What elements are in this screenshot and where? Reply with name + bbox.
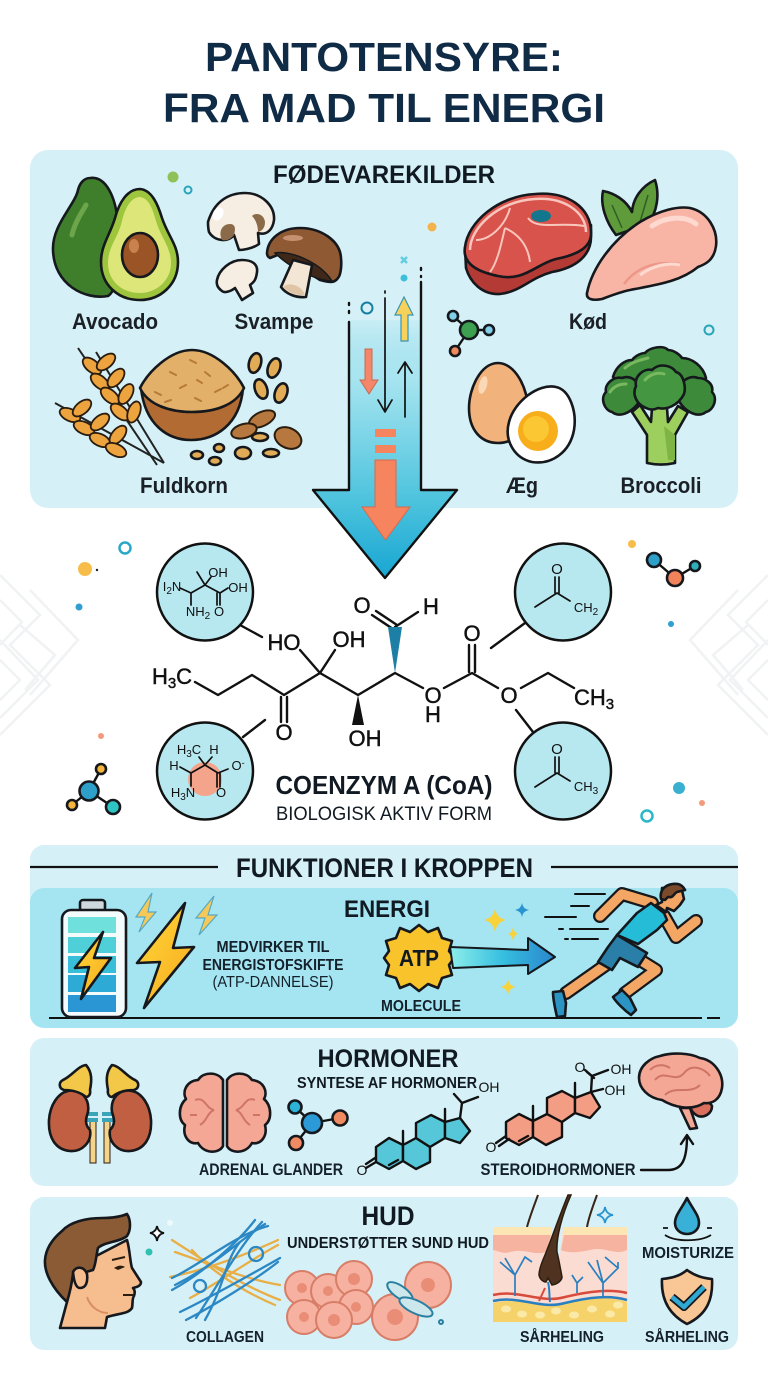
icon: battery bbox=[62, 900, 126, 1017]
heading: skin: HUD bbox=[362, 1201, 414, 1231]
chart: steroid molecule salmon bbox=[486, 1059, 632, 1155]
icon: sparkles bbox=[484, 903, 529, 995]
icon: ATP molecule: ATP bbox=[399, 945, 439, 971]
callout: ketone CH3: CH bbox=[574, 779, 593, 794]
title: FRA MAD TIL ENERGI bbox=[163, 85, 605, 131]
callout: amino acid: H bbox=[169, 758, 179, 773]
text: energy description bbox=[202, 939, 344, 991]
arrow: thin up bbox=[398, 362, 412, 417]
icon: brain side view bbox=[639, 1054, 722, 1129]
caption: coenzyme A: COENZYM A (CoA) bbox=[276, 770, 492, 800]
icon: skin cross section bbox=[493, 1195, 627, 1322]
callout: amino group: O bbox=[214, 604, 224, 619]
icon: shield with check bbox=[662, 1270, 712, 1324]
icon: hormone molecule bbox=[288, 1100, 348, 1150]
text: supports healthy skin: UNDERSTØTTER SUND HUD bbox=[287, 1235, 489, 1252]
icon: sparkles near face bbox=[146, 1220, 173, 1256]
atom labels: CH bbox=[574, 685, 606, 710]
heading: hormones: HORMONER bbox=[318, 1045, 458, 1073]
atom labels: O bbox=[353, 593, 371, 618]
icon: eggs bbox=[469, 363, 575, 462]
label: moisturize: MOISTURIZE bbox=[642, 1245, 734, 1262]
text: energy description: ENERGISTOFSKIFTE bbox=[202, 957, 344, 974]
icon: ATP molecule bbox=[384, 925, 454, 991]
callout: amino group bbox=[157, 544, 253, 640]
icon: skin cells bbox=[285, 1261, 451, 1340]
label: broccoli: Broccoli bbox=[620, 473, 702, 498]
atom labels: O bbox=[275, 720, 293, 745]
chart: steroid molecule salmon: O bbox=[575, 1059, 586, 1075]
panel: functions in the body bbox=[30, 845, 738, 1028]
atom labels: 3 bbox=[606, 696, 614, 713]
atom labels: H bbox=[425, 702, 441, 727]
callout: amino acid: N bbox=[186, 785, 195, 800]
icon: kidneys and adrenal glands bbox=[49, 1065, 151, 1163]
atom labels: O bbox=[500, 683, 518, 708]
arrow: yellow up bbox=[395, 297, 413, 341]
icon: runner bbox=[553, 884, 696, 1017]
callout: ketone CH3: O bbox=[551, 741, 563, 758]
heading: energy: ENERGI bbox=[344, 896, 430, 923]
atom labels bbox=[152, 593, 614, 751]
chart: steroid molecule salmon: OH bbox=[610, 1061, 632, 1077]
label: meat: Kød bbox=[569, 309, 607, 334]
atom labels: 3 bbox=[168, 675, 176, 692]
atom labels: OH bbox=[348, 726, 382, 751]
atom labels: C bbox=[176, 664, 192, 689]
callout: amino group: N bbox=[172, 579, 181, 594]
icon: meat bbox=[465, 194, 591, 294]
speed lines bbox=[545, 894, 608, 939]
callout: amino acid: H bbox=[171, 785, 180, 800]
decorative dots and molecules: chemistry area bbox=[67, 540, 705, 822]
bonds bbox=[195, 611, 574, 722]
callout: ketone CH2 bbox=[515, 544, 611, 640]
callout: amino group: 2 bbox=[205, 611, 211, 622]
ground line bbox=[49, 1017, 720, 1019]
atom labels: O bbox=[463, 621, 481, 646]
label: mushrooms: Svampe bbox=[234, 309, 314, 334]
callout: amino group: OH bbox=[228, 580, 248, 595]
atom labels: H bbox=[152, 664, 168, 689]
callout: amino acid bbox=[157, 722, 253, 820]
icon: mushrooms bbox=[208, 193, 341, 300]
decorative dots: food panel bbox=[168, 172, 714, 334]
callout: amino group: I bbox=[163, 579, 166, 594]
text: hormone synthesis: SYNTESE AF HORMONER bbox=[297, 1075, 477, 1092]
chart: steroid molecule blue bbox=[357, 1079, 500, 1178]
panel: hormones bbox=[30, 1038, 738, 1186]
label: adrenal glands: ADRENAL GLANDER bbox=[199, 1160, 343, 1179]
text: molecule label: MOLECULE bbox=[381, 998, 461, 1015]
chart: steroid molecule blue: O bbox=[357, 1162, 368, 1178]
arrow: small salmon down bbox=[360, 349, 378, 394]
chart: coenzyme A molecule structure bbox=[152, 544, 614, 820]
icon: face profile bbox=[45, 1214, 141, 1328]
atom labels: O bbox=[424, 683, 442, 708]
arrow: central orange bbox=[362, 429, 410, 540]
label: wound healing center: SÅRHELING bbox=[520, 1327, 604, 1346]
heading: food sources: FØDEVAREKILDER bbox=[273, 161, 495, 189]
caption: coenzyme A: BIOLOGISK AKTIV FORM bbox=[276, 804, 492, 825]
background pattern left bbox=[0, 575, 78, 735]
heading: functions: FUNKTIONER I KROPPEN bbox=[236, 853, 533, 883]
icon: collagen fibers bbox=[170, 1220, 280, 1320]
icon: lightning bolts bbox=[136, 893, 217, 1008]
callout: ketone CH3: 3 bbox=[593, 786, 599, 797]
callout connectors bbox=[240, 623, 533, 737]
callout: ketone CH2: CH bbox=[574, 600, 593, 615]
atom labels: OH bbox=[332, 627, 366, 652]
text: energy description: (ATP-DANNELSE) bbox=[212, 974, 334, 991]
icon: molecule green bbox=[448, 311, 494, 356]
callout: amino acid: H bbox=[209, 742, 219, 757]
arrow: steroid to brain bbox=[641, 1135, 693, 1170]
icon: chicken and leaf bbox=[587, 180, 716, 300]
arrow: thin down bbox=[378, 291, 392, 412]
arrow: food to coenzyme bbox=[313, 268, 457, 578]
callout: amino acid: - bbox=[242, 758, 245, 768]
title bbox=[163, 34, 605, 131]
arrow: ATP to runner bbox=[450, 938, 555, 974]
icon: avocado bbox=[53, 178, 178, 300]
callout: ketone CH2: O bbox=[551, 561, 563, 578]
callout: amino acid: O bbox=[216, 785, 226, 800]
chart: steroid molecule salmon: O bbox=[486, 1139, 497, 1155]
callout: ketone CH3 bbox=[515, 722, 611, 820]
atom labels: HO bbox=[268, 630, 300, 655]
callout: amino acid: 3 bbox=[180, 792, 186, 803]
chart: steroid molecule salmon: OH bbox=[604, 1082, 626, 1098]
callout: amino acid: C bbox=[192, 742, 201, 757]
atom labels: H bbox=[423, 594, 439, 619]
callout: amino acid: O bbox=[231, 758, 242, 773]
label: whole grains: Fuldkorn bbox=[140, 473, 228, 498]
panel: food sources bbox=[30, 150, 738, 508]
title: PANTOTENSYRE: bbox=[205, 34, 563, 80]
background pattern right bbox=[690, 575, 768, 735]
callout: amino acid: 3 bbox=[186, 749, 192, 760]
callout: amino group: OH bbox=[208, 565, 228, 580]
chart: steroid molecule blue: OH bbox=[478, 1079, 500, 1095]
wedge bonds bbox=[352, 627, 402, 725]
panel: skin bbox=[30, 1195, 738, 1350]
caption: coenzyme A bbox=[276, 770, 492, 825]
icon: brain top view bbox=[180, 1074, 270, 1152]
icon: broccoli bbox=[603, 347, 715, 464]
icon: water drop bbox=[663, 1198, 712, 1240]
callout: ketone CH2: 2 bbox=[593, 607, 599, 618]
icon: sparkle blue bbox=[597, 1207, 613, 1223]
callout: amino group: 2 bbox=[166, 586, 172, 597]
callout: amino acid: H bbox=[177, 742, 186, 757]
text: energy description: MEDVIRKER TIL bbox=[216, 939, 330, 956]
label: collagen: COLLAGEN bbox=[186, 1329, 264, 1346]
label: wound healing right: SÅRHELING bbox=[645, 1327, 729, 1346]
panel: energy bbox=[30, 884, 738, 1028]
callout: amino group: NH bbox=[186, 604, 205, 619]
icon: whole grains bbox=[55, 348, 305, 465]
label: steroid hormones: STEROIDHORMONER bbox=[480, 1160, 636, 1179]
label: egg: Æg bbox=[506, 473, 538, 498]
label: avocado: Avocado bbox=[72, 309, 158, 334]
